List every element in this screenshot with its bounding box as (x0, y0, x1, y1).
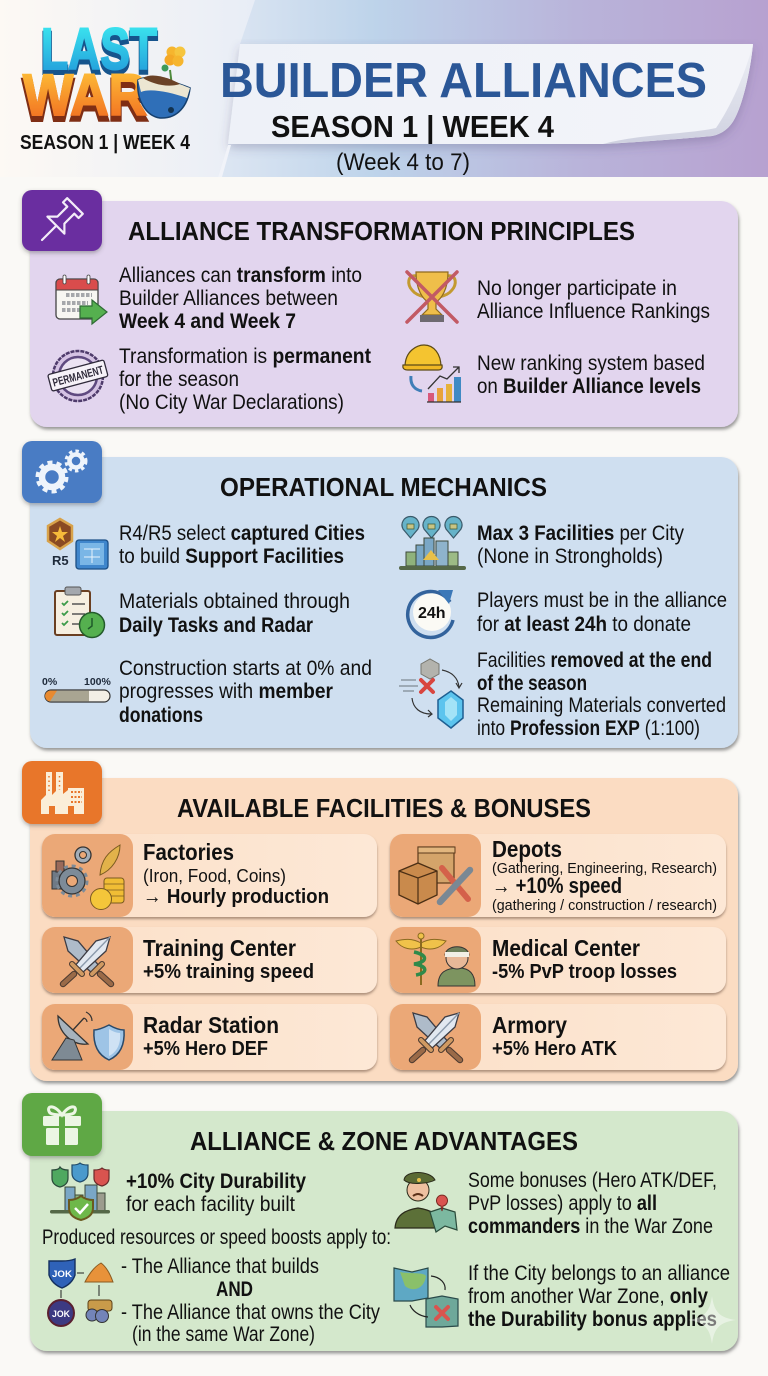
date range: (Week 4 to 7) (336, 149, 470, 176)
header banner (0, 0, 768, 177)
card: depots (390, 834, 726, 917)
card: depots: → +10% speed (492, 873, 622, 898)
text: max facilities: Max 3 Facilities per City (477, 522, 684, 545)
text: apply to heading: Produced resources or speed boosts apply to: (42, 1226, 391, 1249)
text: alliance builds: AND (216, 1278, 253, 1301)
text: facilities removed: of the season (477, 672, 587, 695)
text: max facilities: (None in Strongholds) (477, 545, 663, 568)
card: radar station: +5% Hero DEF (143, 1037, 268, 1060)
icon: 24h clock (408, 590, 453, 637)
text: new ranking: New ranking system based (477, 352, 705, 375)
text: permanent (119, 345, 371, 414)
icon: facility to crystal conversion (399, 659, 463, 728)
paper ribbon (228, 44, 753, 144)
text: alliance builds: - The Alliance that owns the City (121, 1301, 380, 1324)
icon: city with three pins (399, 516, 466, 570)
text: rankings exit (477, 277, 710, 323)
text: rankings exit: No longer participate in (477, 277, 677, 300)
text: other war zone: from another War Zone, only (468, 1285, 708, 1308)
card: depots: Depots (492, 836, 562, 862)
text: 24h rule: for at least 24h to donate (477, 613, 691, 636)
text: durability: +10% City Durability (126, 1170, 306, 1193)
text: materials: Daily Tasks and Radar (119, 614, 313, 637)
flower (170, 70, 172, 86)
text: commanders: Some bonuses (Hero ATK/DEF, (468, 1169, 717, 1192)
text: facilities removed: Remaining Materials converted (477, 694, 726, 717)
text: other war zone (468, 1262, 730, 1331)
heading: OPERATIONAL MECHANICS (220, 474, 547, 502)
icon badge: gears (22, 441, 102, 503)
text: commanders: commanders in the War Zone (468, 1215, 713, 1238)
text: alliance builds: (in the same War Zone) (132, 1323, 315, 1346)
text: transform window: Builder Alliances between (119, 287, 338, 310)
game logo: Last War (23, 17, 190, 133)
icon: crossed swords (412, 1013, 460, 1060)
icon: crossed swords (63, 937, 111, 984)
text: max facilities (477, 522, 684, 568)
text: rankings exit: Alliance Influence Rankings (477, 300, 710, 323)
icon: hard hat and growth chart (403, 345, 461, 402)
icon: commander with map (395, 1172, 457, 1232)
card: factories (42, 834, 377, 917)
text: select cities: R4/R5 select captured Cities (119, 522, 365, 545)
card: armory: +5% Hero ATK (492, 1037, 617, 1060)
text: 24h rule: Players must be in the alliance (477, 589, 727, 612)
card: medical center: -5% PvP troop losses (492, 960, 677, 983)
text: new ranking: on Builder Alliance levels (477, 375, 701, 398)
text: select cities: to build Support Facilities (119, 545, 344, 568)
panel: available facilities and bonuses (22, 761, 738, 1081)
text: durability: for each facility built (126, 1193, 295, 1216)
text: durability (126, 1170, 306, 1216)
card: factories: Factories (143, 839, 234, 865)
icon: progress bar (42, 676, 112, 702)
text: facilities removed (477, 649, 726, 740)
icon: clipboard with clock (55, 587, 104, 638)
card: medical center (390, 927, 726, 993)
icon: alliance to resource flow: JOK (52, 1269, 73, 1279)
icon: permanent stamp: PERMANENT (52, 364, 105, 389)
card: training center (42, 927, 377, 993)
icon: alliance to resource flow: JOK (52, 1309, 70, 1319)
text: construction: Construction starts at 0% and (119, 657, 372, 680)
panel: operational mechanics (22, 441, 738, 748)
text: new ranking (477, 352, 705, 398)
icon: progress bar: 0% (42, 676, 58, 688)
card: factories: (Iron, Food, Coins) (143, 866, 286, 886)
heading: ALLIANCE & ZONE ADVANTAGES (190, 1128, 578, 1156)
pot (138, 77, 190, 118)
text: alliance builds (121, 1255, 380, 1346)
heading: AVAILABLE FACILITIES & BONUSES (177, 795, 591, 823)
icon: 24h clock: 24h (418, 605, 446, 622)
text: transform window (119, 264, 362, 333)
text: facilities removed: into Profession EXP (1:100) (477, 717, 700, 740)
icon: crates and wrench (399, 847, 470, 904)
text: materials (119, 590, 350, 637)
icon: R5 badge and blueprint (48, 519, 108, 569)
card: armory: Armory (492, 1012, 567, 1038)
sparkle watermark (688, 1296, 736, 1344)
game logo: Last War: WAR (23, 63, 147, 128)
text: facilities removed: Facilities removed at the end (477, 649, 712, 672)
icon: maps with cross (394, 1268, 458, 1327)
text: commanders: PvP losses) apply to all (468, 1192, 657, 1215)
card: factories: → Hourly production (143, 885, 329, 908)
icon: gears, wheat, coins (52, 845, 124, 910)
text: permanent: Transformation is permanent (119, 345, 371, 368)
card: medical center: Medical Center (492, 935, 640, 961)
icon: alliance to resource flow (48, 1259, 113, 1326)
icon: progress bar: 100% (84, 676, 112, 688)
icon: radar dish and shield (52, 1012, 124, 1060)
text: permanent: for the season (119, 368, 239, 391)
heading: ALLIANCE TRANSFORMATION PRINCIPLES (128, 218, 635, 246)
text: other war zone: If the City belongs to an alliance (468, 1262, 730, 1285)
text: materials: Materials obtained through (119, 590, 350, 613)
card: training center: Training Center (143, 935, 296, 961)
logo caption: SEASON 1 | WEEK 4 (20, 132, 191, 154)
card: depots: (gathering / construction / research) (492, 897, 717, 914)
icon: crossed out trophy (407, 272, 457, 322)
text: other war zone: the Durability bonus applies (468, 1308, 717, 1331)
icon: calendar with arrow (56, 275, 107, 324)
text: commanders (468, 1169, 717, 1238)
text: transform window: Alliances can transform into (119, 264, 362, 287)
text: permanent: (No City War Declarations) (119, 391, 344, 414)
icon: city with shields (50, 1163, 110, 1220)
card: training center: +5% training speed (143, 960, 314, 983)
icon: permanent stamp (48, 351, 108, 401)
text: alliance builds: - The Alliance that builds (121, 1255, 319, 1278)
game logo: Last War: LAST (41, 21, 157, 86)
icon badge: factory (22, 761, 102, 824)
text: construction: donations (119, 704, 203, 727)
card: armory (390, 1004, 726, 1070)
text: 24h rule (477, 589, 727, 636)
panel: alliance transformation principles (22, 190, 738, 427)
game logo: Last War: WAR (23, 68, 147, 133)
subtitle: SEASON 1 | WEEK 4 (271, 109, 555, 144)
game logo: Last War: LAST (41, 17, 157, 82)
text: transform window: Week 4 and Week 7 (119, 310, 296, 333)
text: construction: progresses with member (119, 680, 333, 703)
text: select cities (119, 522, 365, 568)
icon badge: pushpin (22, 190, 102, 251)
title: BUILDER ALLIANCES (220, 54, 707, 108)
icon badge: gift (22, 1093, 102, 1156)
icon: caduceus and soldier (396, 933, 475, 986)
text: construction (119, 657, 372, 727)
card: radar station (42, 1004, 377, 1070)
card: depots: (Gathering, Engineering, Research) (492, 860, 717, 877)
panel: alliance and zone advantages (22, 1093, 738, 1351)
icon: R5 badge and blueprint: R5 (52, 553, 69, 568)
card: radar station: Radar Station (143, 1012, 279, 1038)
